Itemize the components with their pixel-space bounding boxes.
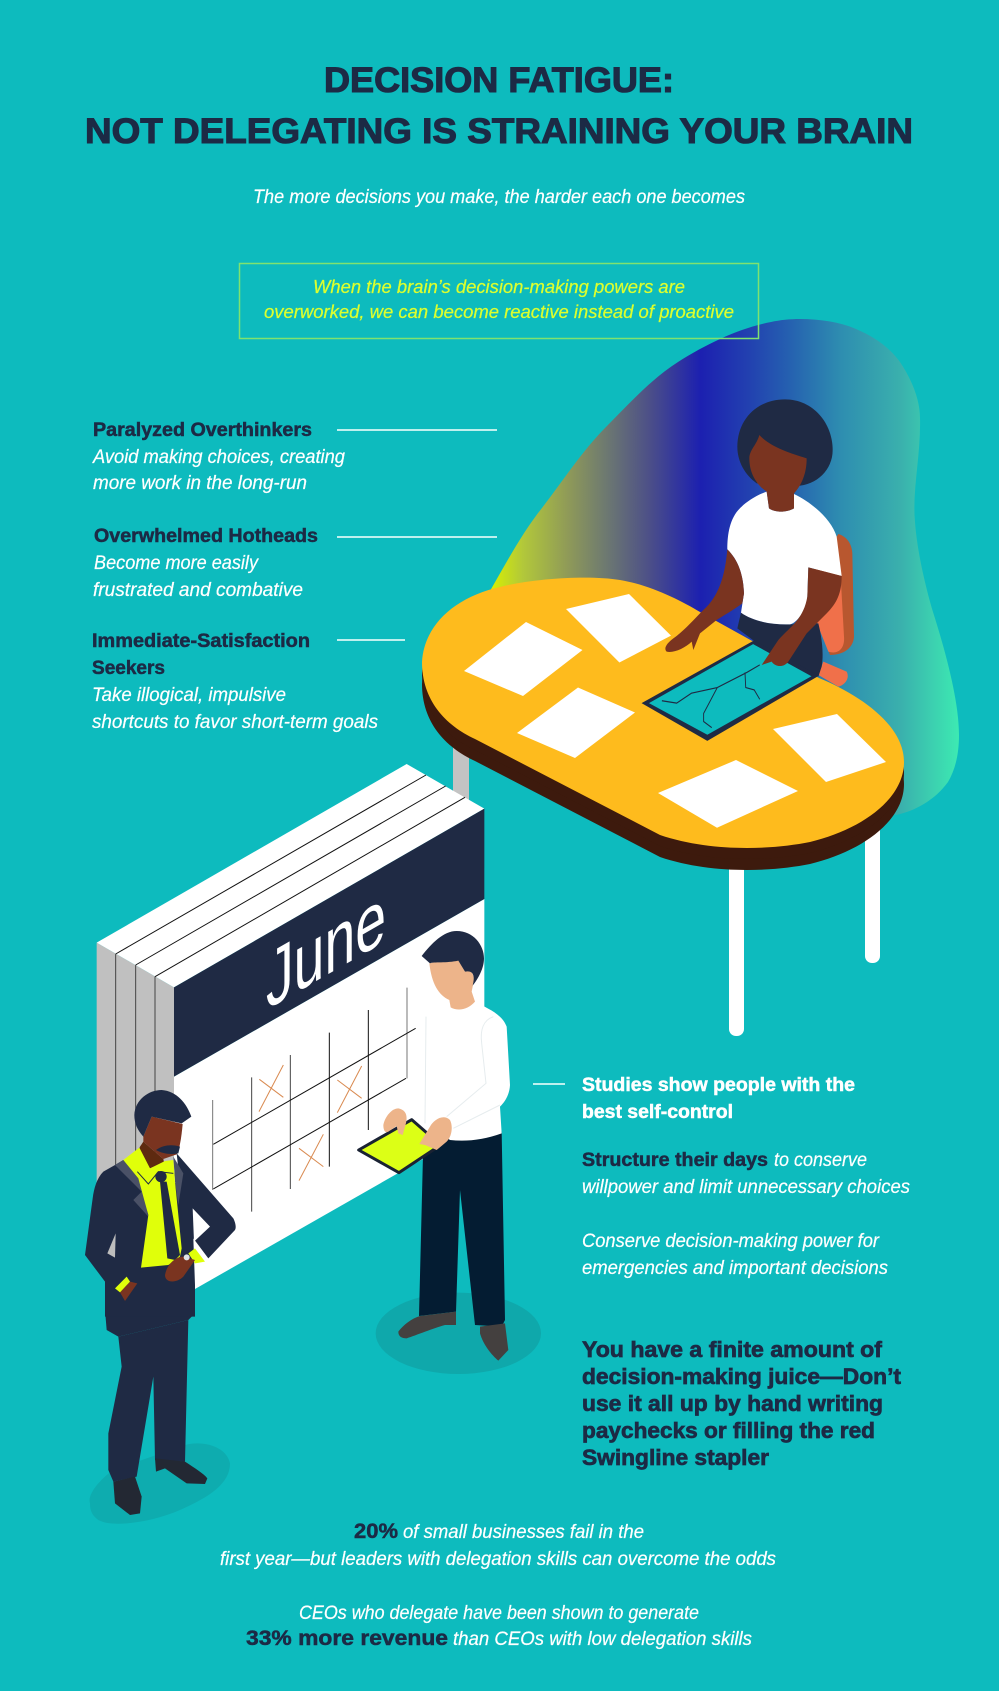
text block: overwhelmed hotheads: Overwhelmed Hotheads	[94, 526, 318, 547]
text block: decision-making juice: use it all up by hand writing	[582, 1391, 883, 1416]
statistic: 33% more revenue: 33% more revenue	[246, 1627, 448, 1650]
statistic: 20% of small businesses	[220, 1520, 776, 1570]
woman shirt	[727, 492, 842, 624]
text block: decision-making juice: Swingline stapler	[582, 1445, 769, 1470]
man in suit lower body	[90, 1310, 230, 1524]
statistic: 33% more revenue: than CEOs with low delegation skills	[453, 1629, 752, 1650]
shirt	[123, 1148, 182, 1268]
arm gaps	[107, 1208, 210, 1258]
crossed-off days	[259, 1065, 362, 1181]
lapels	[115, 1157, 183, 1217]
month label: June	[266, 869, 386, 1028]
gradient blob behind seated woman	[490, 319, 959, 815]
text block: self-control studies: Structure their days	[582, 1150, 768, 1171]
statistic: 33% more revenue: CEOs who delegate have been shown to generate	[299, 1603, 699, 1624]
shirt	[393, 1000, 510, 1141]
collar line	[137, 1172, 173, 1184]
calendar face	[174, 899, 484, 1300]
neck	[137, 1142, 164, 1168]
woman arms	[665, 549, 842, 666]
shirt folds	[425, 1017, 500, 1128]
standing man upper body	[359, 931, 510, 1173]
face	[429, 960, 475, 1009]
text block: immediate-satisfaction seekers: shortcuts to favor short-term goals	[92, 712, 378, 733]
calendar grid	[213, 988, 416, 1212]
hair	[422, 931, 484, 986]
text block: paralyzed overthinkers: Avoid making choices, creating	[92, 447, 345, 468]
floor shadow	[90, 1443, 230, 1524]
text block: paralyzed overthinkers: Paralyzed Overthinkers	[93, 420, 312, 441]
text block: decision-making juice: decision-making juice—Don’t	[582, 1364, 902, 1389]
text block: overwhelmed hotheads	[93, 526, 318, 601]
floor shadow	[376, 1293, 541, 1374]
statistic: 20% of small businesses: 20%	[354, 1520, 398, 1543]
text block: decision-making juice: paychecks or filling the red	[582, 1418, 875, 1443]
statistic: 33% more revenue	[246, 1603, 752, 1650]
trousers	[419, 1132, 505, 1327]
text block: immediate-satisfaction seekers	[92, 631, 378, 733]
text block: immediate-satisfaction seekers: Seekers	[92, 658, 165, 679]
woman face	[749, 435, 807, 512]
statistic: 20% of small businesses: of small businesses fail in the	[403, 1522, 644, 1543]
man in suit upper body	[85, 1090, 236, 1317]
leader lines	[337, 430, 565, 1084]
papers on table	[464, 594, 886, 828]
title	[85, 61, 913, 151]
cracked map tablet on table	[642, 640, 819, 741]
calendar side pages	[97, 943, 174, 1190]
text block: self-control studies: to conserve	[774, 1150, 867, 1171]
callout box: overworked, we can become reactive instead of proactive	[264, 301, 734, 322]
seated woman	[665, 399, 842, 666]
callout box	[240, 264, 758, 338]
jacket	[85, 1153, 236, 1317]
text block: immediate-satisfaction seekers: Immediate-Satisfaction	[92, 631, 310, 652]
text block: overwhelmed hotheads: Become more easily	[94, 553, 259, 574]
text block: self-control studies: best self-control	[582, 1102, 733, 1123]
text block: decision-making juice: You have a finite amount of	[582, 1337, 883, 1362]
callout box: When the brain’s decision-making powers are	[313, 276, 685, 297]
shoes	[113, 1458, 207, 1515]
tie	[155, 1171, 180, 1260]
calendar page edges	[116, 775, 465, 1190]
text block: self-control studies: willpower and limit unnecessary choices	[582, 1177, 910, 1198]
text block: overwhelmed hotheads: frustrated and combative	[93, 580, 303, 601]
text block: self-control studies	[582, 1075, 910, 1279]
title: DECISION FATIGUE:	[324, 61, 674, 100]
hand and watch	[165, 1248, 205, 1281]
table	[422, 578, 904, 870]
text block: paralyzed overthinkers: more work in the long-run	[93, 473, 307, 494]
moustache	[156, 1145, 180, 1154]
chair	[808, 534, 854, 687]
title: NOT DELEGATING IS STRAINING YOUR BRAIN	[85, 112, 913, 151]
tablet	[359, 1120, 441, 1173]
trousers	[108, 1320, 188, 1482]
text block: self-control studies: Conserve decision-making power for	[582, 1231, 880, 1252]
subtitle: The more decisions you make, the harder each one becomes	[253, 187, 745, 208]
month band	[174, 809, 484, 1077]
woman trousers	[737, 613, 823, 677]
jacket skirt	[105, 1310, 195, 1337]
statistic: 20% of small businesses: first year—but leaders with delegation skills can overcome the odds	[220, 1549, 776, 1570]
hands	[383, 1108, 452, 1150]
text block: self-control studies: Studies show people with the	[582, 1075, 855, 1096]
text block: decision-making juice	[582, 1337, 902, 1470]
standing man lower body	[376, 1132, 541, 1374]
text block: paralyzed overthinkers	[92, 420, 345, 494]
table legs	[453, 730, 880, 1036]
text block: self-control studies: emergencies and important decisions	[582, 1258, 888, 1279]
calendar top pages	[97, 764, 484, 987]
hair	[134, 1090, 191, 1137]
face	[143, 1117, 183, 1159]
shoes	[398, 1312, 508, 1361]
pocket hand	[115, 1277, 137, 1301]
woman hair	[737, 399, 833, 486]
calendar	[97, 764, 484, 1300]
text block: immediate-satisfaction seekers: Take illogical, impulsive	[92, 685, 286, 706]
